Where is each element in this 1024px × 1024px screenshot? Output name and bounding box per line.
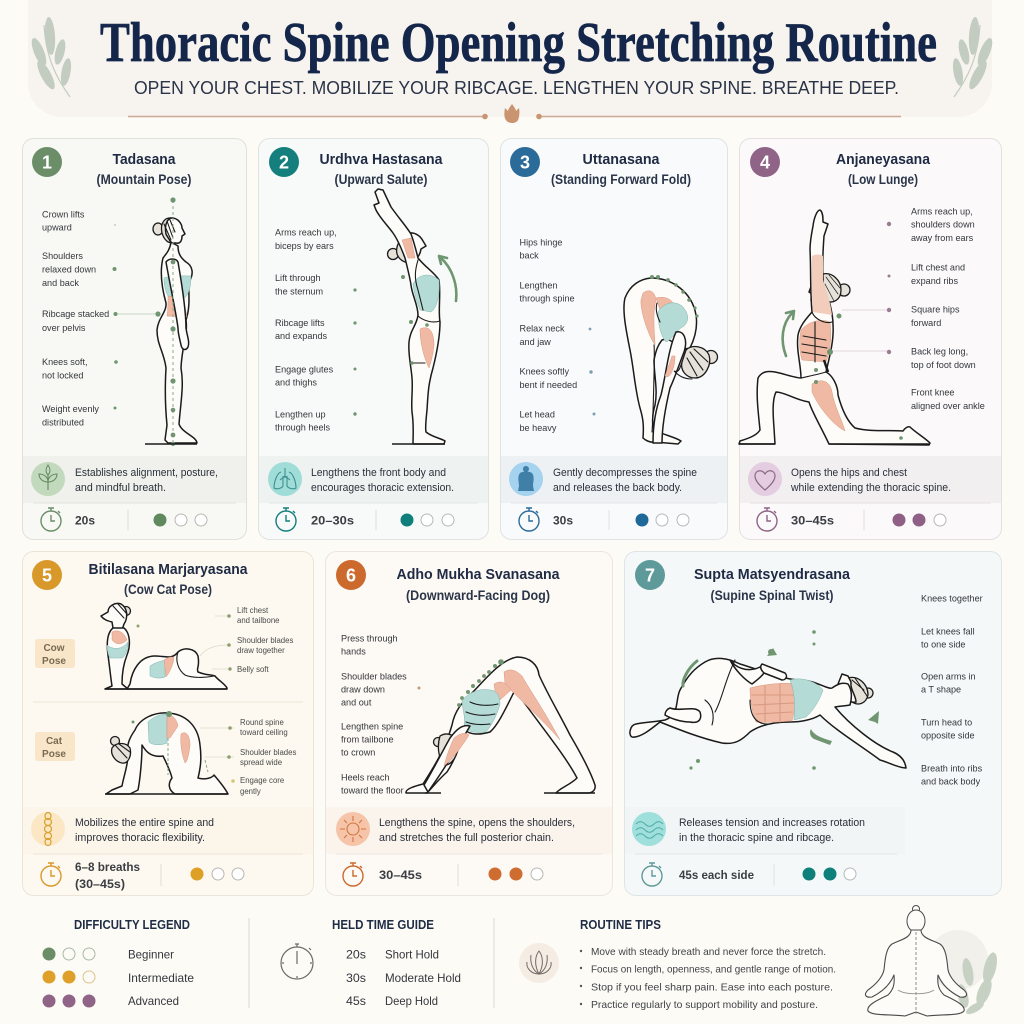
annotations: cow: and tailbone (237, 616, 280, 625)
annotations 2: Engage glutes (275, 364, 334, 374)
benefit 3: and releases the back body. (553, 482, 682, 494)
icon: stopwatch (281, 944, 313, 979)
number badge 7: 7 (645, 566, 655, 586)
number badge 5: 5 (42, 566, 52, 586)
annotations 1: Knees soft, (42, 357, 88, 367)
annotations 4: top of foot down (911, 360, 976, 370)
annotations 1: relaxed down (42, 264, 96, 274)
annotations 2: and thighs (275, 378, 317, 388)
benefit 6: and stretches the full posterior chain. (379, 832, 554, 844)
benefit 3 (509, 462, 697, 496)
routine tips: Practice regularly to support mobility and posture. (591, 999, 818, 1011)
annotations 6: Lengthen spine (341, 722, 403, 732)
icon: right laurel (951, 17, 995, 97)
difficulty legend: Intermediate (128, 971, 194, 985)
heading 4: Anjaneyasana (836, 151, 931, 168)
annotations: cow: Shoulder blades (237, 636, 293, 645)
annotations 6: toward the floor (341, 786, 404, 796)
label: cow pose (35, 639, 75, 668)
time and difficulty 3: 30s (553, 514, 573, 528)
annotations 1: upward (42, 222, 72, 232)
icon: torso (518, 466, 534, 491)
benefit 7: in the thoracic spine and ribcage. (679, 832, 834, 844)
heading 7: (Supine Spinal Twist) (710, 588, 834, 603)
benefit 5: improves thoracic flexibility. (75, 832, 205, 844)
annotations: cat: Shoulder blades (240, 748, 296, 757)
number badge 3 (510, 147, 540, 177)
annotations 7: Turn head to (921, 718, 972, 728)
icon: lungs (274, 468, 296, 489)
hold time guide: 20s (346, 948, 366, 962)
annotations 1: Crown lifts (42, 210, 85, 220)
figure: mountain pose (145, 197, 197, 446)
annotations 4: forward (911, 318, 941, 328)
annotations 2: the sternum (275, 286, 323, 296)
figure: low lunge (739, 210, 930, 445)
difficulty legend: Advanced (128, 994, 179, 1008)
panel: 2 Urdhva Hastasana (258, 138, 488, 540)
annotations 3: Hips hinge (520, 238, 562, 248)
figure: seated meditation (865, 906, 1000, 1016)
heading 1: (Mountain Pose) (96, 172, 192, 187)
heading 2: Urdhva Hastasana (320, 151, 443, 168)
annotations 6: Heels reach (341, 772, 390, 782)
annotations 6: Press through (341, 634, 398, 644)
number badge 6 (336, 560, 366, 590)
annotations 1: Ribcage stacked (42, 309, 109, 319)
label: cow pose: Cow (43, 643, 65, 654)
annotations 6: Shoulder blades (341, 672, 407, 682)
annotations 6 (341, 634, 420, 796)
heading 5 (88, 561, 248, 597)
annotations 3: Lengthen (520, 280, 557, 290)
annotations 3: be heavy (520, 423, 557, 433)
number badge 1: 1 (42, 152, 52, 172)
figure: supine twist (630, 630, 906, 770)
time and difficulty 2 (276, 508, 454, 531)
hold time guide (281, 917, 461, 1008)
time and difficulty 6 (343, 863, 543, 886)
heading 1: Tadasana (112, 151, 176, 168)
annotations 3: and jaw (520, 337, 551, 347)
number badge 4: 4 (760, 152, 770, 172)
annotations 1: Weight evenly (42, 404, 99, 414)
time and difficulty 3 (519, 508, 689, 531)
heading 5: Bitilasana Marjaryasana (88, 561, 248, 578)
time and difficulty 5: 6–8 breaths (75, 860, 140, 874)
figure: upward salute (374, 189, 456, 444)
annotations 1: Shoulders (42, 251, 83, 261)
annotations 2: Arms reach up, (275, 228, 337, 238)
heading 3: (Standing Forward Fold) (551, 172, 691, 187)
annotations 2: and expands (275, 331, 328, 341)
number badge 3: 3 (520, 152, 530, 172)
number badge 5 (32, 560, 62, 590)
routine tips: Focus on length, openness, and gentle range of motion. (591, 964, 836, 976)
benefit 7 (632, 812, 865, 846)
benefit 6: Lengthens the spine, opens the shoulders, (379, 817, 575, 829)
annotations 3: bent if needed (520, 380, 577, 390)
time and difficulty 5: (30–45s) (75, 877, 125, 891)
annotations 7: Let knees fall (921, 626, 975, 636)
time and difficulty 5 (41, 860, 244, 891)
routine tips: Move with steady breath and never force the stretch. (591, 946, 826, 958)
annotations 2: Lift through (275, 273, 320, 283)
annotations 3: Let head (520, 410, 555, 420)
annotations 7: to one side (921, 640, 966, 650)
annotations 4: away from ears (911, 233, 974, 243)
figure: downward dog (406, 657, 595, 793)
annotations: cow: Lift chest (237, 606, 269, 615)
annotations 1: distributed (42, 418, 84, 428)
annotations 6: draw down (341, 684, 385, 694)
benefit 2 (268, 462, 454, 496)
label: cat pose: Cat (46, 736, 63, 747)
annotations: cat: gently (240, 787, 261, 796)
annotations: cat: spread wide (240, 758, 282, 767)
annotations 2 (275, 228, 357, 432)
annotations 6: and out (341, 698, 372, 708)
subtitle: OPEN YOUR CHEST. MOBILIZE YOUR RIBCAGE. LENGTHEN YOUR SPINE. BREATHE DEEP. (134, 78, 899, 98)
time and difficulty 6: 30–45s (379, 868, 422, 882)
annotations 3: Relax neck (520, 324, 565, 334)
annotations 7: Knees together (921, 594, 983, 604)
hold time guide: 45s (346, 994, 366, 1008)
benefit 6 (336, 812, 575, 846)
arrow: knee rotation (683, 661, 697, 686)
annotations 4: Back leg long, (911, 346, 968, 356)
icon: heart (755, 471, 775, 490)
annotations: cow: Belly soft (237, 665, 269, 674)
figure: forward fold (624, 275, 718, 444)
annotations 4: Front knee (911, 388, 954, 398)
number badge 1 (32, 147, 62, 177)
routine tips: ROUTINE TIPS (580, 917, 661, 932)
annotations 7: a T shape (921, 684, 961, 694)
icon: lotus (527, 951, 551, 974)
annotations: cat: toward ceiling (240, 728, 288, 737)
arrow: lift (783, 311, 794, 356)
panel: 5 Bitilasana Marjaryasana (22, 552, 314, 896)
annotations 7: opposite side (921, 730, 975, 740)
annotations 1: over pelvis (42, 323, 86, 333)
time and difficulty 1 (41, 508, 207, 531)
arrow: back bend (439, 256, 456, 301)
benefit 1 (31, 462, 218, 496)
annotations 1: not locked (42, 370, 83, 380)
annotations 7: and back body (921, 776, 981, 786)
figure: cat pose (105, 711, 228, 794)
icon: spine chain (44, 812, 52, 846)
time and difficulty 7 (642, 863, 856, 886)
annotations 7: Open arms in (921, 672, 976, 682)
heading 2 (320, 151, 443, 187)
panel: 3 Uttanasana (500, 138, 728, 540)
heading 7 (694, 566, 851, 603)
hold time guide: HELD TIME GUIDE (332, 917, 434, 932)
annotations 6: from tailbone (341, 734, 394, 744)
panel: 6 Adho Mukha Svanasana (326, 552, 612, 896)
header panel (28, 0, 995, 123)
annotations 6: hands (341, 646, 366, 656)
number badge 4 (750, 147, 780, 177)
time and difficulty 4 (757, 508, 946, 531)
time and difficulty 2: 20–30s (311, 514, 354, 528)
heading 1 (96, 151, 192, 187)
annotations 4: aligned over ankle (911, 401, 985, 411)
hold time guide: 30s (346, 971, 366, 985)
heading 6: (Downward-Facing Dog) (406, 588, 550, 603)
heading 2: (Upward Salute) (334, 172, 428, 187)
annotations 1: and back (42, 278, 79, 288)
time and difficulty 4: 30–45s (791, 514, 834, 528)
number badge 2 (269, 147, 299, 177)
benefit 7: Releases tension and increases rotation (679, 817, 865, 829)
label: cat pose (35, 732, 75, 761)
annotations 4 (832, 206, 985, 411)
benefit 4: Opens the hips and chest (791, 467, 907, 479)
annotations 1 (42, 210, 158, 428)
annotations 7: Breath into ribs (921, 764, 983, 774)
annotations 4: shoulders down (911, 220, 975, 230)
annotations 4: Lift chest and (911, 262, 965, 272)
difficulty legend: Beginner (128, 948, 174, 962)
heading 4: (Low Lunge) (848, 172, 918, 187)
heading 6 (396, 566, 560, 603)
heading 4 (836, 151, 931, 187)
figure: cow pose (101, 603, 227, 689)
benefit 1: and mindful breath. (75, 482, 166, 494)
heading 7: Supta Matsyendrasana (694, 566, 851, 583)
panel: 7 Supta Matsyendrasana (624, 552, 1002, 896)
benefit 4 (748, 462, 951, 496)
annotations: cat (200, 718, 296, 796)
routine tips (519, 917, 836, 1011)
heading 3 (551, 151, 691, 187)
lotus divider (128, 104, 901, 123)
difficulty legend: DIFFICULTY LEGEND (74, 917, 190, 932)
benefit 2: encourages thoracic extension. (311, 482, 454, 494)
annotations 2: Ribcage lifts (275, 318, 325, 328)
annotations: cow (136, 606, 293, 674)
annotations: cat: Engage core (240, 776, 284, 785)
benefit 1: Establishes alignment, posture, (75, 467, 218, 479)
heading 6: Adho Mukha Svanasana (396, 566, 560, 583)
label: cat pose: Pose (42, 749, 66, 760)
difficulty legend (42, 917, 194, 1008)
icon: waves (636, 822, 663, 838)
icon: sun (340, 816, 366, 842)
number badge 7 (635, 560, 665, 590)
routine tips: Stop if you feel sharp pain. Ease into each posture. (591, 982, 833, 994)
annotations: cow: draw together (237, 646, 285, 655)
annotations 4: Arms reach up, (911, 206, 973, 216)
benefit 5 (31, 812, 214, 846)
annotations 4: Square hips (911, 304, 960, 314)
number badge 2: 2 (279, 152, 289, 172)
annotations 3: Knees softly (520, 366, 569, 376)
annotations 2: Lengthen up (275, 410, 326, 420)
number badge 6: 6 (346, 566, 356, 586)
icon: left laurel (29, 17, 73, 97)
panel: 1 Tadasana (22, 138, 246, 540)
annotations 3 (520, 238, 596, 433)
heading 3: Uttanasana (582, 151, 660, 168)
annotations 2: through heels (275, 422, 331, 432)
annotations 2: biceps by ears (275, 241, 334, 251)
benefit 3: Gently decompresses the spine (553, 467, 697, 479)
heading 5: (Cow Cat Pose) (124, 582, 212, 597)
benefit 5: Mobilizes the entire spine and (75, 817, 214, 829)
hold time guide: Moderate Hold (385, 971, 461, 985)
annotations 3: through spine (520, 294, 575, 304)
label: cow pose: Pose (42, 656, 66, 667)
time and difficulty 1: 20s (75, 514, 95, 528)
benefit 2: Lengthens the front body and (311, 467, 446, 479)
panel: 4 Anjaneyasana (739, 138, 1002, 540)
annotations 3: back (520, 250, 539, 260)
time and difficulty 7: 45s each side (679, 868, 754, 882)
annotations 4: expand ribs (911, 276, 958, 286)
benefit 4: while extending the thoracic spine. (790, 482, 951, 494)
annotations 6: to crown (341, 748, 375, 758)
hold time guide: Short Hold (385, 948, 439, 962)
annotations 7 (921, 594, 983, 786)
annotations: cat: Round spine (240, 718, 284, 727)
hold time guide: Deep Hold (385, 994, 438, 1008)
icon: leaf (39, 465, 57, 490)
